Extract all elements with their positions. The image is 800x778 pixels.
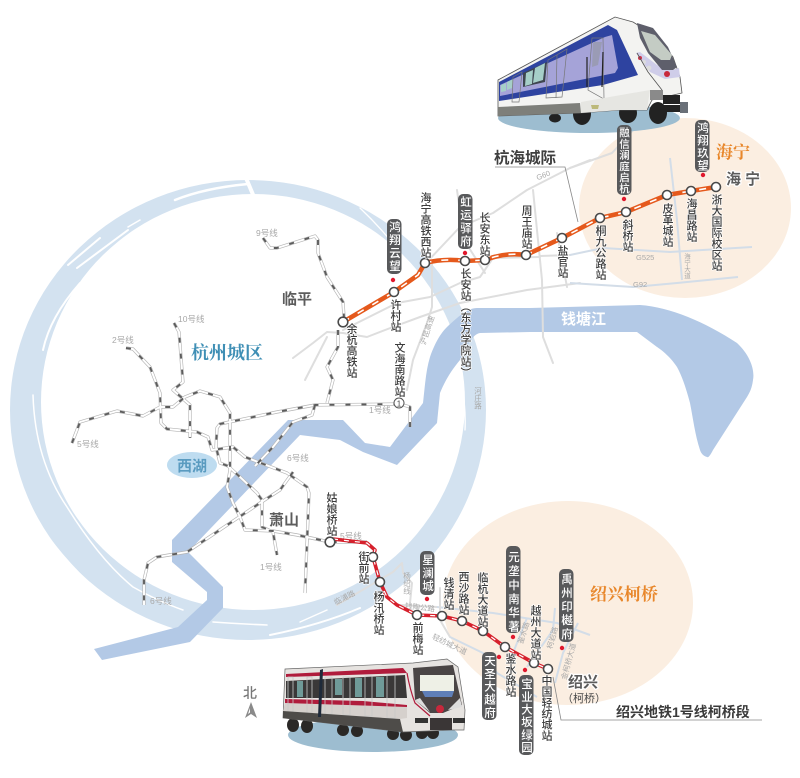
stations: Hanghai intercity: 1 [397, 400, 402, 408]
Qiantang river [94, 305, 753, 660]
road labels [332, 169, 691, 681]
property pill: 元垄中南华著: 元垄中南华著 [507, 551, 520, 634]
stations: Shaoxing Line 1: 前梅站 [411, 621, 424, 655]
stations: Shaoxing Line 1: 中国轻纺城站 [540, 674, 552, 741]
stations: Shaoxing Line 1: 鉴水路站 [504, 652, 516, 697]
stations: Shaoxing Line 1: 姑娘桥站 [325, 491, 338, 536]
West Lake [167, 452, 217, 478]
stations: Hanghai intercity: 文海南路站 [393, 341, 406, 397]
Hangzhou metro lines [72, 236, 410, 605]
metro line labels: 1号线 [260, 562, 282, 572]
road labels: 河庄路 [473, 387, 482, 410]
Hanghai intercity route line [343, 187, 716, 322]
heading: Shaoxing Line 1 Keqiao section [553, 677, 762, 720]
illustration: purple train [498, 17, 688, 133]
metro line labels: 6号线 [150, 596, 172, 606]
stations: Shaoxing Line 1: 杨汛桥站 [372, 590, 384, 635]
label: Xiaoshan: 萧山 [269, 512, 299, 529]
property pill: 天圣大越府 [482, 652, 501, 720]
stations: Hanghai intercity: 桐九公路站 [594, 224, 606, 280]
stations: Hanghai intercity: 长安站（东方学院站） [459, 268, 472, 378]
property pill: 星澜城 [420, 551, 434, 601]
metro line labels: 5号线 [340, 531, 362, 541]
Hangzhou city ring [10, 176, 486, 644]
stations: Shaoxing Line 1: 钱清站 [442, 576, 454, 610]
road labels: 海宁大道 [682, 252, 691, 280]
stations: Hanghai intercity: 斜桥站 [621, 218, 634, 252]
metro line labels: 6号线 [287, 453, 309, 463]
label: Haining gray: 海 宁 [726, 170, 760, 188]
property pill: 天圣大越府: 天圣大越府 [483, 655, 496, 719]
river label: 钱塘江 [561, 310, 606, 328]
label: Haining orange: 海宁 [716, 143, 750, 162]
West Lake: 西湖 [177, 458, 207, 475]
property pill: 禹州印樾府: 禹州印樾府 [560, 572, 573, 642]
icon: north arrow: 北 [243, 685, 257, 701]
stations: Hanghai intercity: 余杭高铁站 [345, 322, 358, 378]
Shaoxing Line 1 Keqiao route line [333, 539, 548, 669]
metro line labels: 10号线 [178, 314, 205, 324]
metro line labels: 9号线 [256, 228, 278, 238]
label: Hangzhou urban area: 杭州城区 [191, 343, 263, 363]
label: Keqiao: （柯桥） [562, 692, 606, 705]
metro line labels: 2号线 [112, 335, 134, 345]
road labels: 杨绍线 [402, 571, 412, 595]
stations: Shaoxing Line 1: 越州大道站 [529, 605, 542, 660]
road labels: 鉴水路 [515, 620, 531, 645]
stations: Shaoxing Line 1 [325, 491, 552, 741]
metro line labels: 5号线 [77, 439, 99, 449]
road labels: 临浦路 [332, 588, 357, 607]
stations: Hanghai intercity: 长安东站 [478, 212, 490, 256]
heading: Hanghai intercity: 杭海城际 [494, 148, 557, 167]
metro line labels: 1号线 [369, 405, 391, 415]
stations: Hanghai intercity: 许村站 [389, 298, 402, 332]
Shaoxing Keqiao area circle [443, 501, 693, 705]
property pill: 禹州印樾府 [559, 569, 574, 650]
road labels: 钱陶公路 [405, 600, 436, 614]
metro line labels [77, 228, 391, 606]
stations: Shaoxing Line 1: 街前站 [357, 550, 370, 584]
stations: Hanghai intercity [338, 182, 722, 408]
illustration: red-striped train [283, 659, 465, 752]
property pill: 鸿翔玖望: 鸿翔玖望 [696, 121, 709, 172]
stations: Hanghai intercity: 盐官站 [556, 245, 568, 278]
icon: north arrow [243, 685, 257, 718]
property pill: 星澜城: 星澜城 [421, 554, 434, 593]
stations: Hanghai intercity: 浙大国际校区站 [710, 193, 722, 271]
Haining area circle [579, 118, 791, 298]
stations: Hanghai intercity: 皮革城站 [661, 203, 674, 247]
stations: Hanghai intercity: 海宁高铁西站 [419, 191, 432, 258]
label: Linping: 临平 [282, 290, 312, 308]
property pill: 宝业大坂绿园: 宝业大坂绿园 [520, 677, 533, 754]
stations: Hanghai intercity: 海昌路站 [685, 197, 698, 242]
label: Shaoxing gray: 绍兴 [568, 674, 598, 691]
heading: Shaoxing Line 1 Keqiao section: 绍兴地铁1号线柯桥段 [616, 704, 750, 720]
property pill: 融信澜庭启杭: 融信澜庭启杭 [618, 127, 630, 194]
property pill: 虹运驿府: 虹运驿府 [459, 195, 472, 248]
road labels: G525 [636, 253, 654, 262]
stations: Shaoxing Line 1: 临杭大道站 [476, 571, 488, 627]
label: Shaoxing Keqiao orange: 绍兴柯桥 [590, 584, 658, 604]
road labels: 金柯桥大道 [559, 641, 578, 681]
road network [293, 127, 752, 697]
property pill: 虹运驿府 [458, 194, 472, 255]
stations: Hanghai intercity: 周王庙站 [520, 205, 532, 249]
road labels: 轻纺城大道 [431, 631, 469, 657]
property pill: 鸿翔云望 [387, 219, 402, 282]
property pill: 鸿翔云望: 鸿翔云望 [388, 220, 401, 273]
road labels: 沪昆高速 [418, 314, 436, 346]
stations: Shaoxing Line 1: 西沙路站 [457, 571, 470, 615]
heading: Hanghai intercity [494, 148, 578, 222]
road labels: G92 [633, 280, 647, 289]
road labels: 柯岩路 [544, 625, 560, 650]
road labels: G60 [535, 169, 552, 182]
